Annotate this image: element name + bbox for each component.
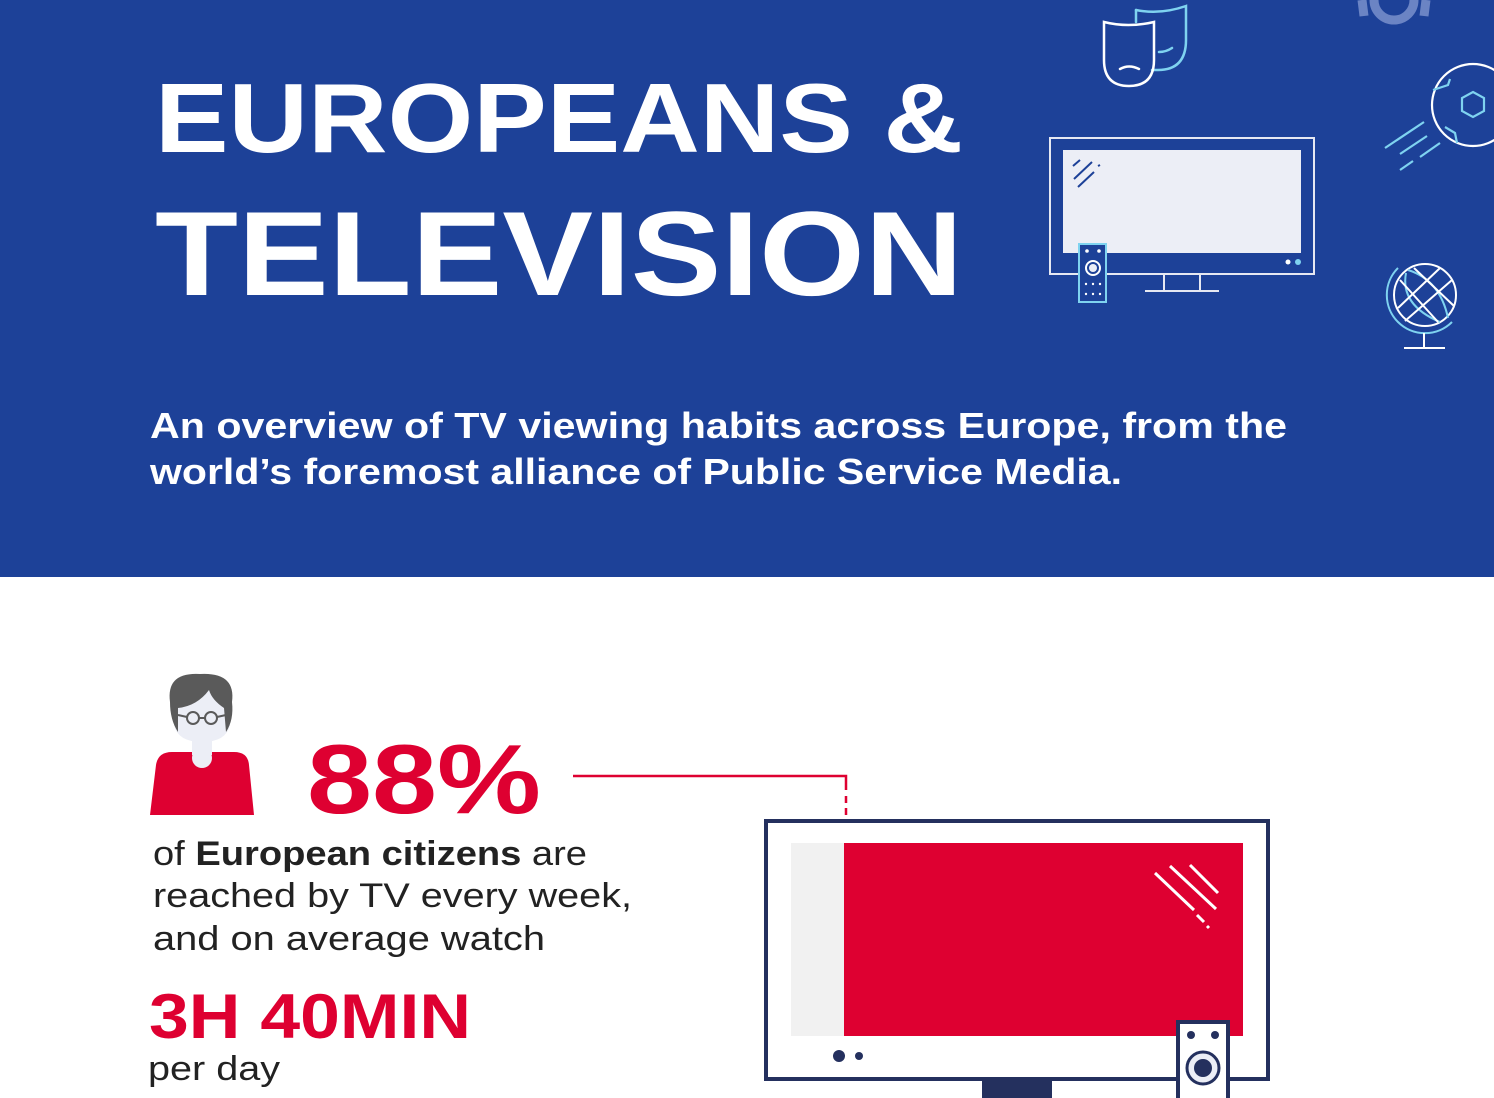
connector line xyxy=(573,776,846,835)
title: EUROPEANS & xyxy=(155,63,963,173)
stat: 88%: 88% xyxy=(307,724,541,834)
icon: globe xyxy=(1387,264,1456,348)
icon: camera fragment xyxy=(1362,0,1426,20)
text: per day: per day xyxy=(148,1050,280,1088)
icon: theatre masks xyxy=(1104,6,1186,86)
subtitle xyxy=(149,405,1287,492)
subtitle: world’s foremost alliance of Public Service Media. xyxy=(149,451,1122,492)
text block: description xyxy=(153,835,632,958)
text block: description: of European citizens are xyxy=(153,835,587,873)
stat: 3H 40MIN: 3H 40MIN xyxy=(149,982,471,1052)
text block: description: and on average watch xyxy=(153,920,545,958)
icon: remote large xyxy=(1178,1022,1228,1098)
icon: remote xyxy=(1079,244,1106,302)
subtitle: An overview of TV viewing habits across Europe, from the xyxy=(150,405,1287,446)
icon: header television xyxy=(1050,138,1314,302)
text block: description: reached by TV every week, xyxy=(153,877,632,915)
icon: large television xyxy=(766,821,1268,1098)
icon: football xyxy=(1385,64,1494,170)
title xyxy=(155,63,963,321)
icon: person xyxy=(150,674,254,815)
title: TELEVISION xyxy=(155,187,963,321)
header band xyxy=(0,0,1494,577)
